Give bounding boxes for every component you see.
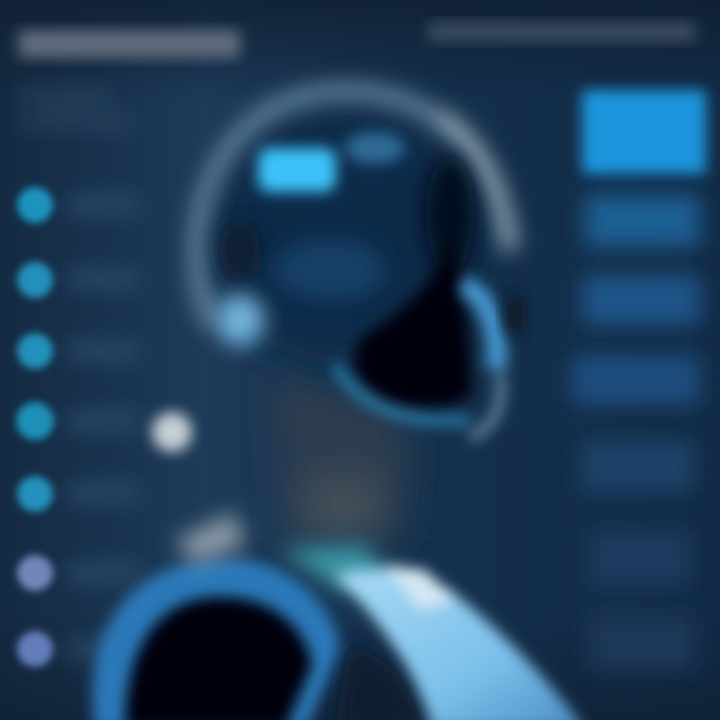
list text lines: [68, 196, 138, 658]
left shoulder glow: [92, 558, 342, 720]
chest dark: [335, 640, 425, 720]
left list with bullets: [16, 187, 138, 667]
head illustration: [197, 91, 527, 540]
bright brain highlight: [258, 132, 405, 192]
top right subtitle: [428, 22, 696, 42]
halo ring: [197, 91, 510, 325]
collar highlight: [175, 512, 395, 590]
right column panels: [572, 90, 706, 670]
white highlight node: [152, 412, 192, 452]
highlighted panel: [582, 90, 706, 174]
nose shadow: [503, 293, 527, 337]
stacked panels: [572, 195, 700, 670]
right shoulder light: [335, 565, 585, 720]
left shoulder dark core: [125, 597, 312, 720]
head fill: [210, 105, 480, 365]
dark crown shadow: [220, 155, 474, 300]
left intro text: [20, 90, 132, 128]
bullet icons: [16, 187, 54, 667]
title block: [18, 30, 240, 58]
shoulders illustration: [92, 512, 585, 720]
neck: [275, 370, 410, 540]
ear glow: [216, 294, 264, 346]
face rim light: [335, 285, 501, 438]
dark face: [354, 245, 472, 408]
